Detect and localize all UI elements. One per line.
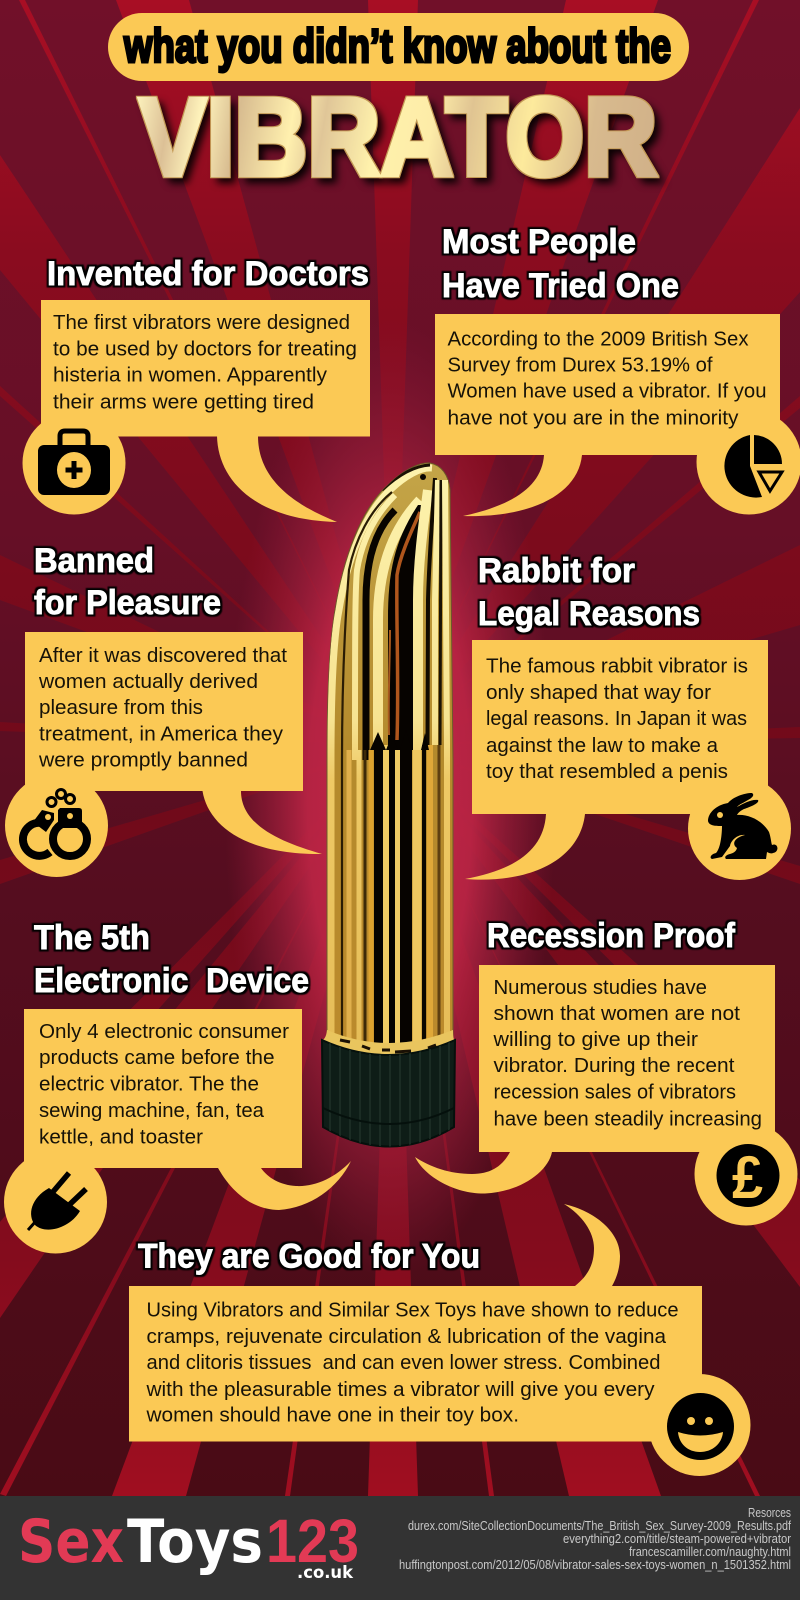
title pill	[108, 13, 689, 81]
body text	[38, 644, 287, 772]
speech bubble 7	[129, 1204, 750, 1476]
body text: Numerous studies have	[494, 976, 707, 999]
body text	[492, 976, 762, 1130]
body text: toy that resembled a penis	[486, 760, 728, 783]
body text: cramps, rejuvenate circulation & lubrication of the vagina	[146, 1325, 667, 1348]
icon: smiley	[667, 1393, 734, 1460]
resources list: Resorces	[748, 1506, 791, 1520]
body text: women should have one in their toy box.	[145, 1404, 519, 1426]
panel: recession proof	[415, 917, 798, 1226]
speech bubble 4	[465, 640, 791, 880]
body text	[53, 311, 357, 414]
body text: histeria in women. Apparently	[53, 364, 328, 386]
heading: recession proof: Recession Proof	[487, 917, 736, 955]
body text: with the pleasurable times a vibrator will give you every	[145, 1378, 655, 1401]
body text: legal reasons. In Japan it was	[486, 707, 747, 730]
body text: their arms were getting tired	[53, 390, 314, 414]
body text: women actually derived	[38, 670, 258, 693]
panel: invented for doctors	[22, 255, 370, 522]
heading: rabbit for: Rabbit for	[478, 552, 635, 590]
heading: have tried one: Have Tried One	[442, 267, 679, 305]
body text: vibrator. During the recent	[494, 1054, 735, 1077]
logo: SexToys123: .co.uk	[297, 1563, 354, 1583]
logo: SexToys123: 123	[266, 1507, 359, 1575]
heading: electronic device: Electronic Device	[34, 962, 309, 1000]
speech bubble 6	[415, 965, 798, 1226]
main title: VIBRATOR: VIBRATOR	[139, 76, 657, 199]
body text	[39, 1020, 289, 1148]
logo: SexToys123	[18, 1507, 359, 1583]
footer bar	[0, 1496, 800, 1600]
body text: kettle, and toaster	[39, 1125, 203, 1148]
speech bubble 5	[4, 1009, 351, 1254]
body text: pleasure from this	[39, 696, 203, 719]
vibrator illustration	[322, 463, 455, 1160]
body text: willing to give up their	[492, 1028, 698, 1051]
logo: SexToys123: Toys	[127, 1507, 263, 1577]
body text: products came before the	[39, 1046, 274, 1069]
body text: After it was discovered that	[39, 644, 287, 667]
heading: banned: Banned	[34, 542, 154, 580]
icon: pound coin: £	[732, 1144, 763, 1211]
heading: for pleasure: for Pleasure	[34, 584, 221, 622]
body text: electric vibrator. The the	[39, 1072, 259, 1095]
body text: Using Vibrators and Similar Sex Toys have shown to reduce	[146, 1298, 678, 1322]
heading: they are good for you: They are Good for You	[138, 1238, 480, 1276]
body text: Only 4 electronic consumer	[39, 1020, 289, 1043]
panel: rabbit for legal reasons	[465, 552, 791, 880]
icon: plug	[28, 1173, 86, 1230]
panel: banned for pleasure	[5, 542, 322, 877]
body text	[145, 1298, 679, 1426]
heading: the 5th: The 5th	[34, 919, 150, 957]
resources list	[399, 1506, 791, 1572]
icon: rabbit	[708, 793, 777, 859]
body text	[448, 328, 766, 430]
body text: sewing machine, fan, tea	[39, 1099, 265, 1122]
heading: legal reasons: Legal Reasons	[478, 595, 700, 633]
body text: have not you are in the minority	[448, 406, 739, 430]
body text: The first vibrators were designed	[53, 311, 350, 334]
body text: shown that women are not	[494, 1002, 740, 1025]
body text: treatment, in America they	[39, 722, 284, 746]
body text: Survey from Durex 53.19% of	[448, 354, 713, 376]
panel: they are good for you	[129, 1204, 750, 1476]
icon: medical bag	[38, 431, 110, 495]
body text: recession sales of vibrators	[494, 1081, 736, 1104]
icon: pie chart	[724, 435, 782, 498]
speech bubble 3	[5, 632, 322, 877]
body text: and clitoris tissues and can even lower stress. Combined	[146, 1351, 660, 1374]
logo: SexToys123: Sex	[18, 1507, 124, 1577]
panel: most people have tried one	[435, 223, 800, 516]
heading: most people: Most People	[442, 223, 636, 261]
body text: against the law to make a	[486, 734, 719, 757]
body text: According to the 2009 British Sex	[448, 328, 749, 350]
icon: handcuffs	[23, 790, 87, 856]
body text: to be used by doctors for treating	[53, 338, 357, 360]
body text	[486, 654, 748, 783]
heading: invented for doctors: Invented for Doctors	[47, 255, 369, 293]
body text: The famous rabbit vibrator is	[486, 654, 748, 678]
speech bubble 2	[435, 314, 800, 516]
body text: have been steadily increasing	[494, 1107, 762, 1130]
panel: the 5th electronic device	[4, 919, 351, 1254]
body text: only shaped that way for	[486, 681, 711, 704]
body text: Women have used a vibrator. If you	[448, 380, 766, 402]
speech bubble 1	[22, 300, 370, 522]
icon: pound coin	[716, 1144, 780, 1211]
body text: were promptly banned	[38, 748, 248, 772]
